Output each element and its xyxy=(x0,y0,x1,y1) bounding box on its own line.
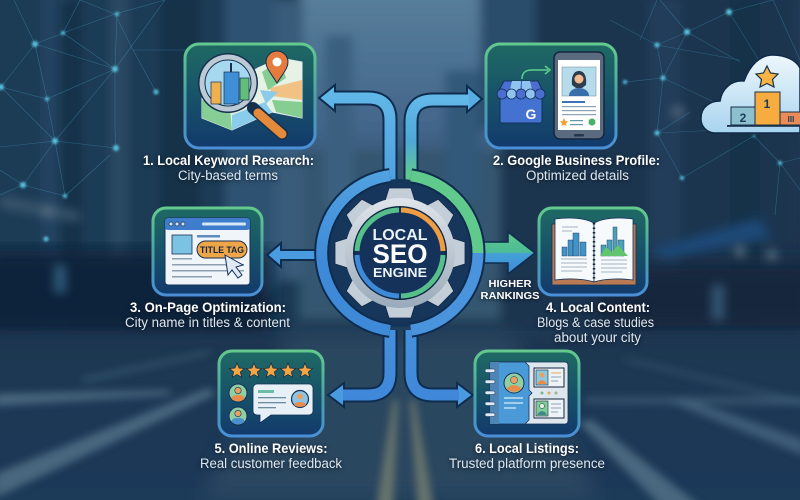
panel 1: local keyword research xyxy=(185,44,315,148)
icon: browser window xyxy=(165,218,250,285)
icon: map pin xyxy=(266,51,288,83)
gear centre xyxy=(354,207,446,299)
icon: phone xyxy=(554,52,604,139)
connector: large right arrow to local content xyxy=(470,232,535,274)
higher rankings label: RANKINGS xyxy=(480,290,540,302)
central engine xyxy=(322,176,478,330)
icon: avatar one xyxy=(229,384,247,402)
label 2: 2. Google Business Profile: xyxy=(493,152,660,168)
icon: magnifier xyxy=(198,53,282,134)
ring arcs xyxy=(322,176,478,330)
label 4: about your city xyxy=(554,330,641,345)
panel 4: local content xyxy=(539,208,647,295)
engine label xyxy=(372,227,428,280)
label 6 xyxy=(449,440,605,471)
label 1 xyxy=(143,152,314,183)
cloud xyxy=(701,55,800,133)
icon: cloud with ranking podium xyxy=(701,55,800,133)
label 1: City-based terms xyxy=(178,168,278,183)
icon: directory book xyxy=(485,362,568,424)
higher rankings label xyxy=(480,278,540,302)
icon: green arrow xyxy=(522,66,550,79)
label 1: 1. Local Keyword Research: xyxy=(143,152,314,168)
label 5 xyxy=(200,440,342,471)
star xyxy=(756,66,778,87)
colored dial ring xyxy=(357,210,443,296)
podium first place: 1 xyxy=(764,97,771,111)
icon: speech bubble xyxy=(253,384,313,423)
network nodes right xyxy=(623,9,782,180)
panel 2: google business profile xyxy=(486,44,616,148)
panel 3: on-page optimization xyxy=(153,208,262,295)
icon: storefront: G xyxy=(526,106,537,122)
icon: map xyxy=(202,58,302,130)
engine label: LOCAL xyxy=(372,227,428,244)
engine label: SEO xyxy=(372,239,428,269)
connector: top-left arrow to keyword research xyxy=(319,85,390,180)
network constellation lines left xyxy=(0,0,200,196)
network nodes left xyxy=(0,12,158,242)
podium base xyxy=(727,125,800,127)
icon: five stars xyxy=(230,363,312,377)
network constellation lines right xyxy=(610,0,800,215)
title tag pill: TITLE TAG xyxy=(200,245,244,255)
connector: bottom-left arrow to online reviews xyxy=(328,330,390,407)
label 3: 3. On-Page Optimization: xyxy=(130,299,286,315)
icon: open book xyxy=(552,218,636,285)
label 4: Blogs & case studies xyxy=(537,315,654,330)
label 4: 4. Local Content: xyxy=(546,299,650,315)
panel 5: online reviews xyxy=(219,351,323,436)
label 2 xyxy=(493,152,660,183)
podium third place: III xyxy=(788,115,794,124)
ring disc xyxy=(326,179,474,327)
icon: avatar two xyxy=(229,407,247,425)
label 2: Optimized details xyxy=(526,168,629,183)
label 6: Trusted platform presence xyxy=(449,456,605,471)
podium second place: 2 xyxy=(740,111,747,125)
higher rankings label: HIGHER xyxy=(488,278,532,290)
label 6: 6. Local Listings: xyxy=(475,440,579,456)
label 5: Real customer feedback xyxy=(200,456,342,471)
connector: left arrow to on-page optimization xyxy=(267,243,322,267)
connector: bottom-right arrow to local listings xyxy=(411,330,473,407)
engine label: ENGINE xyxy=(373,265,427,280)
gear xyxy=(335,188,465,318)
label 5: 5. Online Reviews: xyxy=(214,440,328,456)
connector: top-right arrow to google business profile xyxy=(411,86,482,180)
icon: cursor xyxy=(225,255,243,278)
panel 6: local listings xyxy=(475,351,579,436)
label 3 xyxy=(125,299,290,330)
label 3: City name in titles & content xyxy=(125,315,290,330)
label 4 xyxy=(537,299,654,345)
